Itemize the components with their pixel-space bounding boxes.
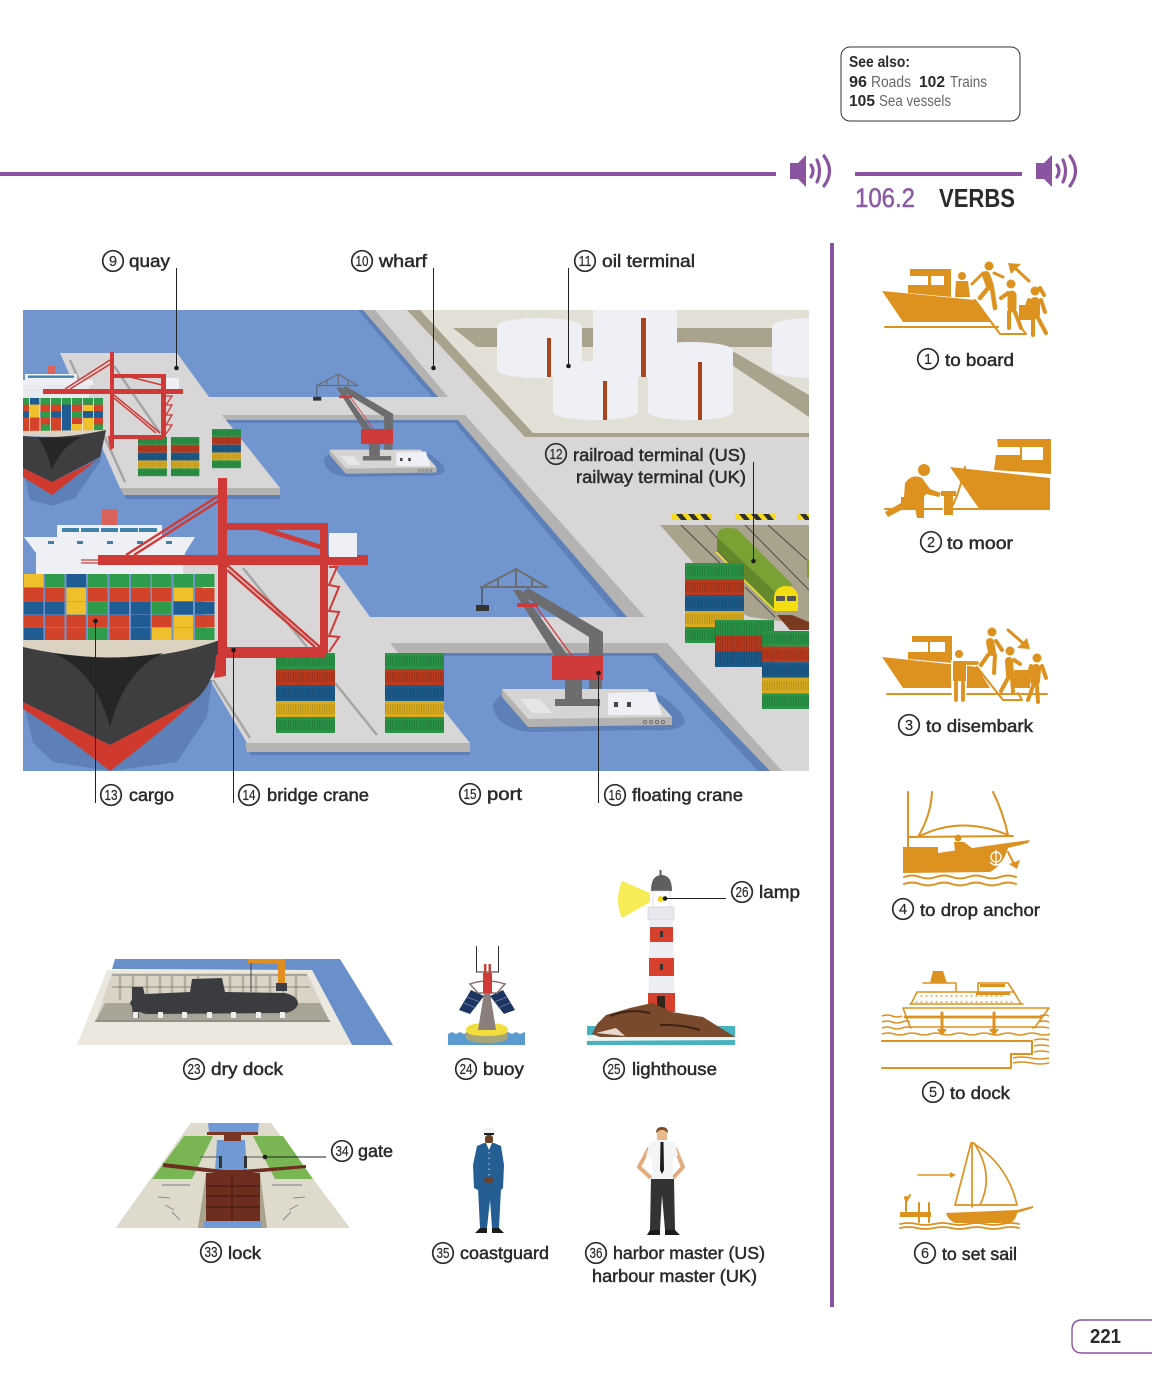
icon: to drop anchor	[903, 792, 1030, 886]
container stacks upper pier	[138, 429, 241, 476]
oil tanks	[497, 310, 809, 420]
label 13 cargo	[93, 619, 174, 805]
rail terminal bed	[660, 525, 809, 625]
icon: to set sail	[900, 1143, 1033, 1229]
label 33 lock	[201, 1242, 261, 1263]
train	[716, 528, 809, 630]
label 2 to moor: to moor	[947, 533, 1013, 553]
label 23 dry dock: dry dock	[211, 1059, 283, 1079]
label 11 oil terminal: 11	[578, 254, 592, 270]
label 24 buoy: buoy	[483, 1059, 524, 1079]
label 24 buoy: 24	[460, 1062, 472, 1078]
large ship	[23, 509, 221, 771]
label 9 quay: quay	[129, 251, 170, 271]
label 25 lighthouse: 25	[608, 1062, 620, 1078]
label 15 port: port	[487, 784, 522, 804]
label 13 cargo: cargo	[129, 785, 174, 805]
see also box: 102	[919, 74, 945, 91]
label 24 buoy	[456, 1059, 524, 1079]
label 26 lamp: 26	[736, 885, 748, 901]
label 14 bridge crane	[231, 648, 369, 805]
label 14 bridge crane: 14	[242, 788, 256, 804]
label 16 floating crane: floating crane	[632, 785, 743, 805]
large bridge crane	[81, 478, 368, 678]
label 5 to dock	[923, 1082, 1010, 1103]
label 5 to dock: 5	[929, 1085, 937, 1101]
label 36 harbor master: harbour master (UK)	[592, 1266, 757, 1286]
figure: coastguard	[473, 1128, 504, 1233]
label 23 dry dock	[184, 1059, 283, 1079]
label 15 port	[460, 784, 522, 804]
label 4 to drop anchor: 4	[899, 902, 907, 918]
heading: 106.2 verbs	[855, 183, 1015, 213]
label 26 lamp: lamp	[759, 882, 800, 902]
label 35 coastguard: 35	[436, 1246, 450, 1262]
label 11 oil terminal: oil terminal	[602, 251, 695, 271]
label 25 lighthouse: lighthouse	[632, 1059, 717, 1079]
label 3 to disembark: to disembark	[926, 716, 1033, 736]
label 2 to moor: 2	[927, 535, 935, 551]
see also box: Trains	[950, 74, 987, 91]
label 4 to drop anchor: to drop anchor	[920, 900, 1040, 920]
label 11 oil terminal	[566, 251, 695, 368]
icon: to moor	[885, 439, 1051, 518]
section rule left	[0, 172, 776, 176]
label 16 floating crane	[596, 671, 743, 805]
hazard barriers	[672, 514, 809, 520]
label 12 railroad terminal: railroad terminal (US)	[573, 445, 746, 465]
icon: speaker right	[1036, 155, 1076, 187]
see also box: See also:	[849, 54, 910, 71]
small ship	[23, 366, 106, 506]
label 34 gate: 34	[336, 1144, 348, 1160]
label 26 lamp	[663, 882, 800, 902]
page number tab	[1072, 1320, 1152, 1353]
illustration: buoy	[448, 946, 525, 1045]
label 3 to disembark: 3	[905, 718, 913, 734]
section rule right	[855, 172, 1022, 176]
label 1 to board: to board	[945, 350, 1014, 370]
panel: port illustration	[23, 310, 852, 771]
label 1 to board	[918, 349, 1014, 370]
see also box: 105	[849, 93, 875, 110]
label 12 railroad terminal	[546, 444, 756, 563]
heading: 106.2 verbs: 106.2	[855, 183, 915, 213]
label 1 to board: 1	[924, 352, 932, 368]
icon: to dock	[882, 971, 1050, 1068]
illustration: lock	[116, 1123, 350, 1228]
oil terminal ground	[407, 310, 809, 437]
icon: to board	[882, 262, 1046, 335]
figure: harbor master	[639, 1127, 683, 1235]
label 3 to disembark	[899, 715, 1033, 736]
label 12 railroad terminal: 12	[550, 447, 562, 463]
icon: speaker left	[790, 155, 830, 187]
label 15 port: 15	[464, 787, 476, 803]
illustration: lighthouse	[587, 870, 735, 1045]
small bridge crane	[43, 352, 183, 450]
label 23 dry dock: 23	[188, 1062, 200, 1078]
label 9 quay	[103, 251, 179, 370]
label 10 wharf: wharf	[378, 251, 427, 271]
rails on piers	[70, 360, 377, 738]
label 10 wharf	[352, 251, 436, 370]
page number tab: 221	[1090, 1326, 1121, 1348]
label 9 quay: 9	[109, 254, 117, 270]
label 35 coastguard: coastguard	[460, 1243, 549, 1263]
label 6 to set sail: 6	[921, 1246, 929, 1262]
label 2 to moor	[921, 532, 1013, 553]
label 36 harbor master	[586, 1243, 765, 1286]
see also box: Roads	[871, 74, 911, 91]
see also box: Sea vessels	[879, 93, 951, 110]
label 16 floating crane: 16	[608, 788, 622, 804]
label 14 bridge crane: bridge crane	[267, 785, 369, 805]
floating crane large	[476, 569, 685, 732]
label 36 harbor master: 36	[590, 1246, 602, 1262]
label 6 to set sail	[915, 1243, 1017, 1264]
column divider	[830, 243, 834, 1307]
label 13 cargo: 13	[104, 788, 118, 804]
label 34 gate: gate	[358, 1141, 393, 1161]
icon: to disembark	[882, 628, 1047, 702]
label 36 harbor master: harbor master (US)	[613, 1243, 765, 1263]
container stacks terminal	[685, 563, 821, 709]
container stacks lower pier	[276, 653, 444, 733]
illustration: dry dock	[77, 959, 393, 1045]
label 33 lock: lock	[228, 1243, 261, 1263]
see also box: 96	[849, 74, 867, 91]
label 34 gate	[263, 1141, 393, 1161]
see also box	[841, 47, 1020, 121]
label 6 to set sail: to set sail	[942, 1244, 1017, 1264]
label 25 lighthouse	[604, 1059, 717, 1079]
label 10 wharf: 10	[356, 254, 368, 270]
label 12 railroad terminal: railway terminal (UK)	[576, 467, 746, 487]
label 33 lock: 33	[204, 1245, 218, 1261]
heading: 106.2 verbs: VERBS	[939, 183, 1015, 213]
land	[60, 310, 809, 771]
floating crane small	[313, 374, 445, 477]
label 5 to dock: to dock	[950, 1083, 1010, 1103]
